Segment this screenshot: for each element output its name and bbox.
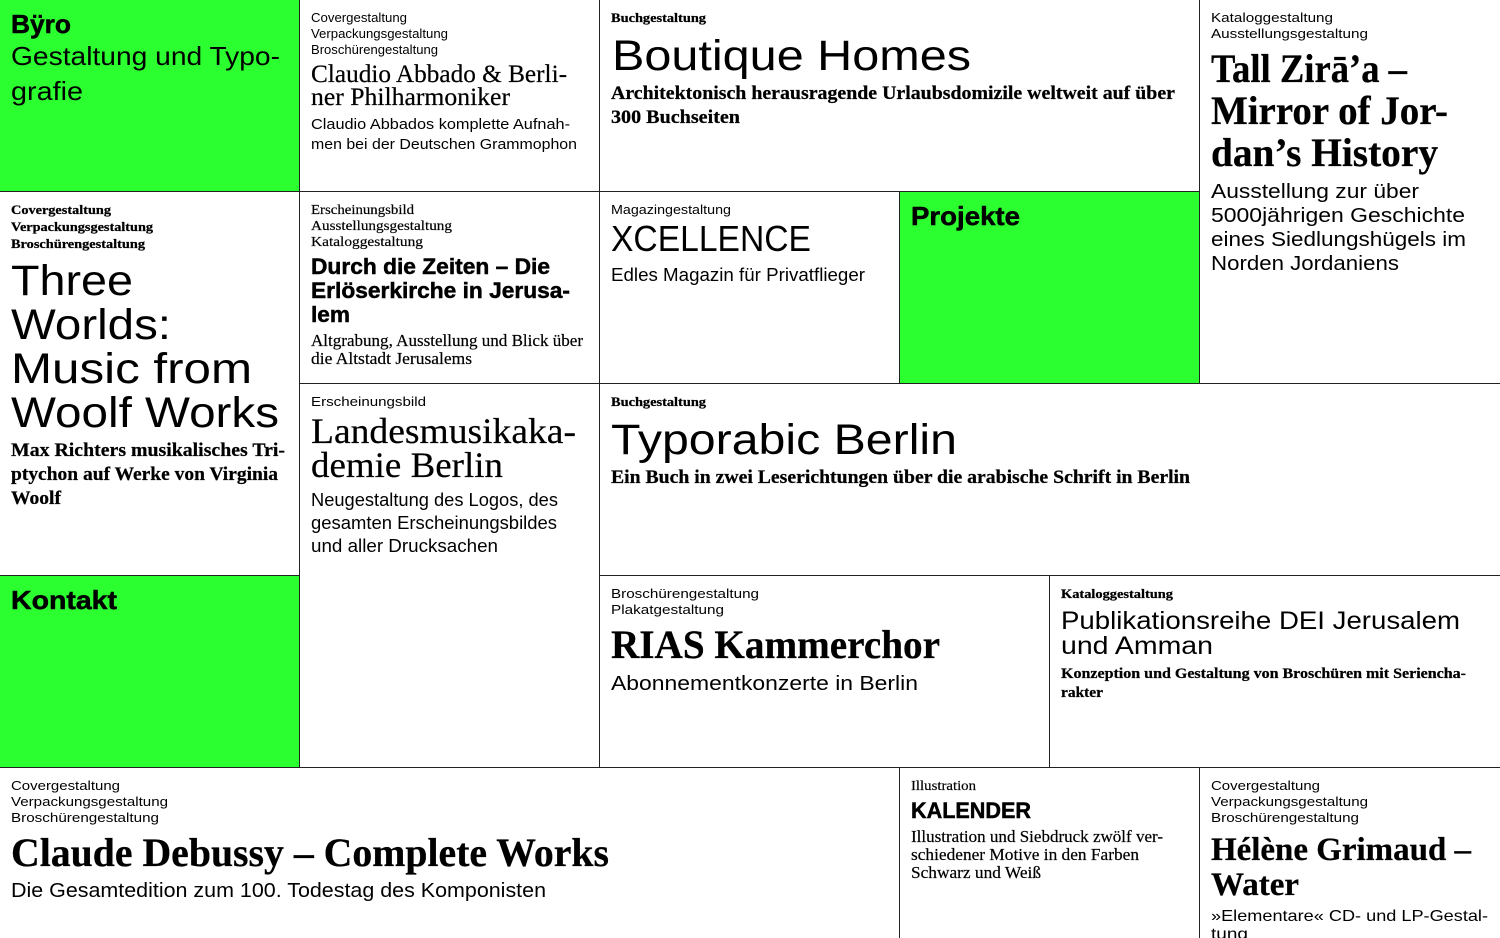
panel: Landesmusikakademie: Neugestaltung des Logos, des: [311, 490, 558, 510]
panel: Three Worlds: Verpackungsgestaltung: [11, 219, 154, 234]
panel: Landesmusikakademie: Landesmusikaka-: [311, 411, 576, 451]
panel: Three Worlds: Worlds:: [11, 301, 171, 349]
panel: Boutique Homes: Boutique Homes: [612, 32, 971, 80]
panel: RIAS Kammerchor: RIAS Kammerchor: [611, 622, 940, 667]
panel: Boutique Homes: Buchgestaltung: [611, 10, 707, 25]
panel: Three Worlds: Three: [11, 257, 133, 305]
panel: Tall Zira'a: Tall Zirā’a –: [1211, 46, 1408, 91]
panel: Durch die Zeiten: Durch die Zeiten – Die: [311, 254, 550, 279]
panel: Landesmusikakademie: [311, 394, 576, 556]
panel: Kalender: KALENDER: [911, 798, 1031, 823]
panel: Publikationsreihe DEI: [1061, 586, 1466, 701]
panel: Landesmusikakademie: und aller Drucksachen: [311, 536, 498, 556]
panel: Claude Debussy: Covergestaltung: [11, 778, 120, 793]
panel: Landesmusikakademie: gesamten Erscheinungsbildes: [311, 513, 557, 533]
panel: Kalender: Illustration und Siebdruck zwölf ver-: [911, 827, 1163, 846]
panel: Three Worlds: [11, 202, 285, 509]
panel: Publikationsreihe DEI: Publikationsreihe DEI Jerusalem: [1061, 607, 1460, 635]
green panels: [0, 0, 1199, 767]
panel: Three Worlds: Max Richters musikalisches Tri-: [11, 440, 285, 461]
panel: RIAS Kammerchor: Plakatgestaltung: [611, 602, 724, 617]
panel: Durch die Zeiten: Kataloggestaltung: [311, 235, 423, 250]
panel: Büro heading: grafie: [11, 76, 83, 106]
panel: Tall Zira'a: [1211, 10, 1466, 275]
panel: Three Worlds: Broschürengestaltung: [11, 236, 146, 251]
panel: Claude Debussy: Verpackungsgestaltung: [11, 794, 168, 809]
panel: Typorabic Berlin: [611, 394, 1190, 488]
panel: Claudio Abbado: Claudio Abbado & Berli-: [311, 61, 567, 88]
panel: Publikationsreihe DEI: Kataloggestaltung: [1061, 586, 1174, 601]
panel: Hélène Grimaud: Covergestaltung: [1211, 778, 1320, 793]
panel: Claudio Abbado: [311, 10, 577, 153]
panel: Three Worlds: Woolf Works: [11, 389, 279, 437]
panel: Claudio Abbado: men bei der Deutschen Grammophon: [311, 136, 577, 153]
panel: XCELLENCE: Magazingestaltung: [611, 202, 731, 217]
panel: Landesmusikakademie: Erscheinungsbild: [311, 394, 426, 409]
panel: Typorabic Berlin: Ein Buch in zwei Leserichtungen über die arabische Schrift in Berlin: [611, 467, 1190, 488]
panel: Kalender: [911, 779, 1163, 882]
panel: Tall Zira'a: eines Siedlungshügels im: [1211, 229, 1466, 251]
panel: Durch die Zeiten: lem: [311, 302, 350, 327]
panel: Tall Zira'a: Norden Jordaniens: [1211, 253, 1399, 275]
panel: RIAS Kammerchor: Broschürengestaltung: [611, 586, 759, 601]
panel: Kalender: schiedener Motive in den Farben: [911, 845, 1139, 864]
panel: Landesmusikakademie: demie Berlin: [311, 445, 503, 485]
panel: Hélène Grimaud: [1211, 778, 1488, 938]
panel: Three Worlds: Music from: [11, 345, 252, 393]
panel: Publikationsreihe DEI: rakter: [1061, 685, 1103, 701]
panel: Typorabic Berlin: Typorabic Berlin: [611, 416, 957, 464]
panel: Tall Zira'a: 5000jährigen Geschichte: [1211, 205, 1465, 227]
panel: Boutique Homes: 300 Buchseiten: [611, 107, 740, 128]
panel: Büro heading: Gestaltung und Typo-: [11, 41, 280, 71]
panel: Durch die Zeiten: Erlöserkirche in Jerusa-: [311, 278, 570, 303]
panel: XCELLENCE: [611, 202, 865, 285]
panel: Three Worlds: Covergestaltung: [11, 202, 112, 217]
panel: Claudio Abbado: Verpackungsgestaltung: [311, 26, 448, 41]
panel: Claude Debussy: Die Gesamtedition zum 100. Todestag des Komponisten: [11, 880, 546, 902]
panel: Durch die Zeiten: Erscheinungsbild: [311, 203, 414, 218]
panel: Claudio Abbado: ner Philharmoniker: [311, 84, 511, 111]
panel: RIAS Kammerchor: Abonnementkonzerte in Berlin: [611, 673, 918, 695]
panel: Claude Debussy: Claude Debussy – Complete Works: [11, 830, 609, 875]
panel: Büro heading: [11, 9, 280, 106]
panel: Hélène Grimaud: Hélène Grimaud –: [1211, 832, 1471, 868]
panel: Publikationsreihe DEI: Konzeption und Gestaltung von Broschüren mit Seriencha-: [1061, 666, 1466, 682]
panel: Three Worlds: ptychon auf Werke von Virginia: [11, 464, 279, 485]
panel: Claudio Abbado: Covergestaltung: [311, 10, 407, 25]
panel: Hélène Grimaud: Water: [1211, 867, 1299, 903]
panel: Boutique Homes: [611, 10, 1176, 128]
panel: Tall Zira'a: Ausstellungsgestaltung: [1211, 26, 1368, 41]
panel: Kalender: Illustration: [911, 779, 976, 794]
heading: Projekte: Projekte: [911, 201, 1020, 231]
panel: Tall Zira'a: dan’s History: [1211, 130, 1438, 175]
panel: Durch die Zeiten: Ausstellungsgestaltung: [311, 219, 452, 234]
panel: Three Worlds: Woolf: [11, 488, 62, 509]
panel: Durch die Zeiten: die Altstadt Jerusalems: [311, 349, 472, 368]
panel: Typorabic Berlin: Buchgestaltung: [611, 394, 707, 409]
panel: Claude Debussy: Broschürengestaltung: [11, 810, 159, 825]
panel: XCELLENCE: Edles Magazin für Privatflieger: [611, 265, 865, 285]
panel: Tall Zira'a: Ausstellung zur über: [1211, 181, 1419, 203]
panel: RIAS Kammerchor: [611, 586, 940, 695]
panel: Tall Zira'a: Kataloggestaltung: [1211, 10, 1333, 25]
panel: Hélène Grimaud: »Elementare« CD- und LP-Gestal-: [1211, 908, 1488, 925]
panel: Claude Debussy: [11, 778, 609, 902]
panel: Tall Zira'a: Mirror of Jor-: [1211, 88, 1448, 133]
panel: Hélène Grimaud: Broschürengestaltung: [1211, 810, 1359, 825]
panel: Kalender: Schwarz und Weiß: [911, 863, 1041, 882]
panel: Durch die Zeiten: [311, 203, 584, 368]
panel: XCELLENCE: XCELLENCE: [611, 218, 811, 259]
panel: Publikationsreihe DEI: und Amman: [1061, 632, 1213, 660]
panel: Durch die Zeiten: Altgrabung, Ausstellung und Blick über: [311, 331, 584, 350]
panel: Büro heading: Bÿro: [11, 9, 71, 39]
panel: Claudio Abbado: Claudio Abbados komplette Aufnah-: [311, 116, 570, 133]
panel: Boutique Homes: Architektonisch herausragende Urlaubsdomizile weltweit auf über: [611, 83, 1176, 104]
panel: Claudio Abbado: Broschürengestaltung: [311, 42, 438, 57]
panel: Hélène Grimaud: Verpackungsgestaltung: [1211, 794, 1368, 809]
heading: Kontakt: Kontakt: [11, 585, 117, 615]
